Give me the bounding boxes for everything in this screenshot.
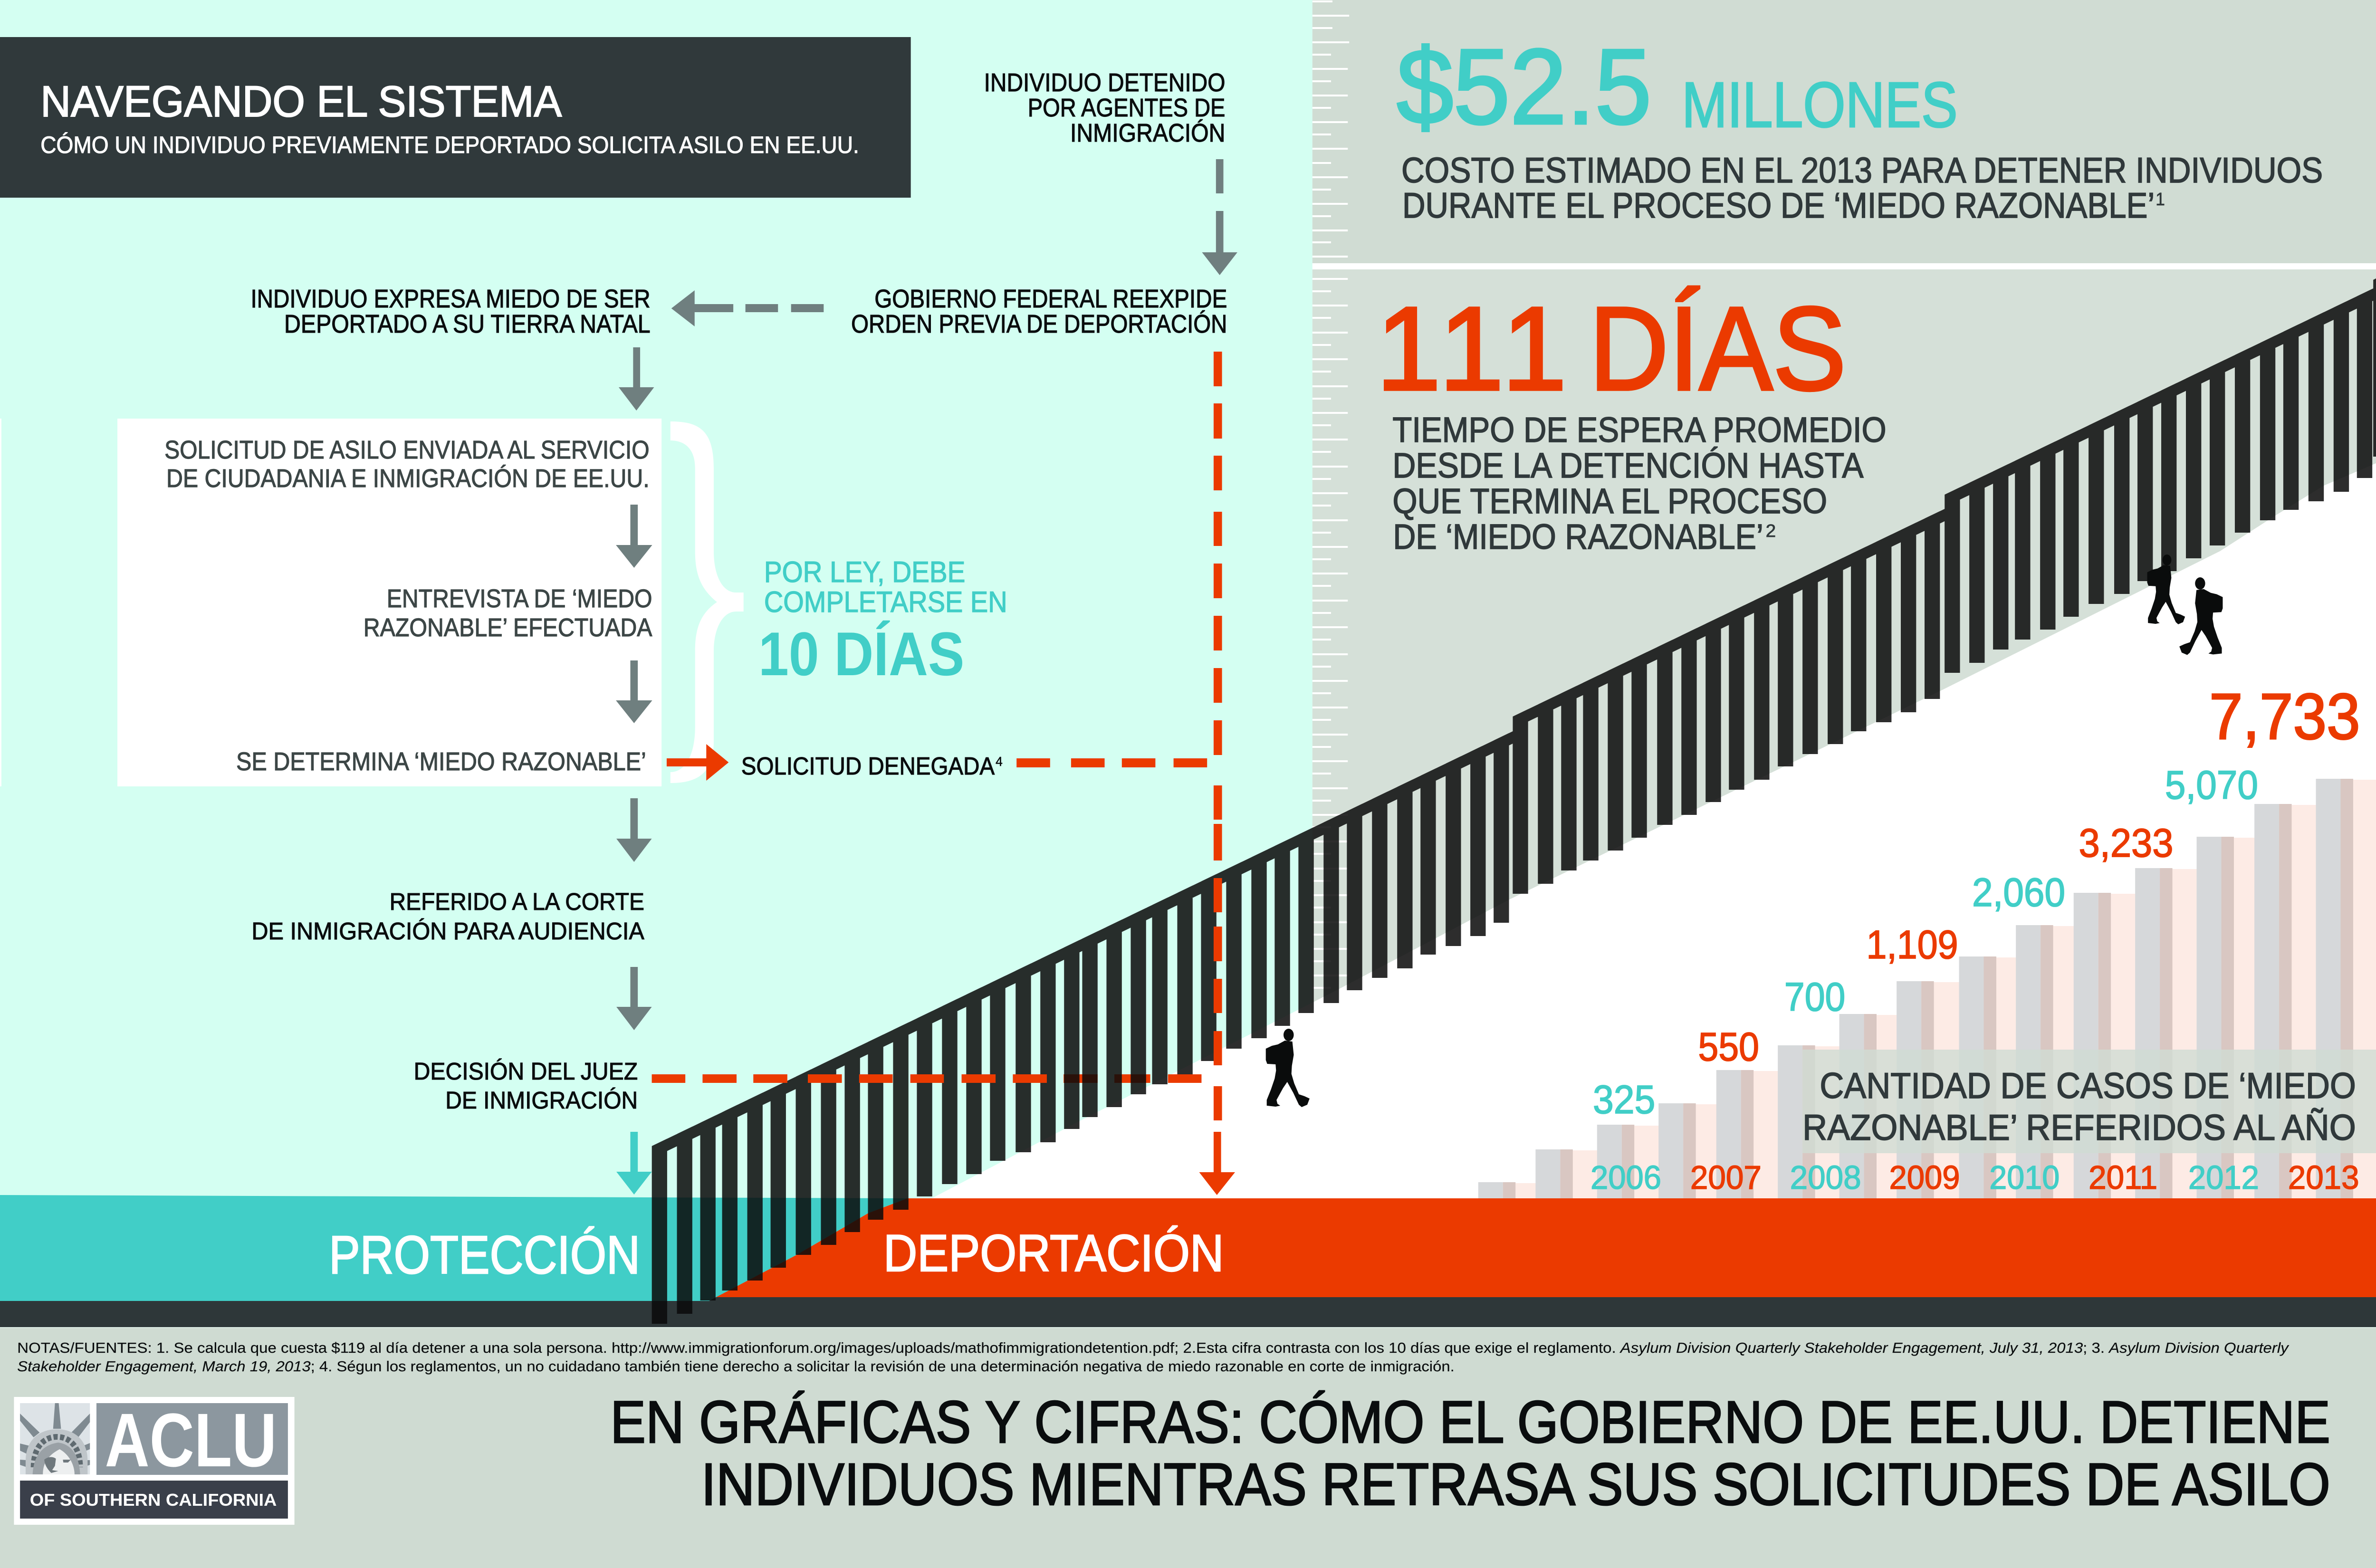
header box: CÓMO UN INDIVIDUO PREVIAMENTE DEPORTADO SOLICITA ASILO EN EE.UU.	[40, 132, 859, 158]
chart value labels: 550	[1698, 1024, 1759, 1069]
stat: average wait	[1376, 283, 1887, 556]
panel: mint background	[0, 0, 1313, 1198]
chart year labels	[1590, 1158, 2359, 1196]
step: detained individual	[984, 69, 1225, 147]
chart year labels: 2013	[2288, 1158, 2359, 1196]
chart year labels: 2012	[2188, 1158, 2259, 1196]
step: individual expresses fear: INDIVIDUO EXPRESA MIEDO DE SER	[250, 285, 651, 313]
chart value labels: 7,733	[2209, 680, 2360, 753]
arrow: dashed grey left	[671, 290, 824, 326]
panel: lower grey background	[1313, 269, 2376, 1003]
step: federal government reissues order: GOBIERNO FEDERAL REEXPIDE	[874, 285, 1227, 313]
icon: walking person one	[2147, 555, 2185, 624]
label: protection: PROTECCIÓN	[329, 1225, 640, 1285]
chart year labels: 2010	[1989, 1158, 2060, 1196]
logo: ACLU of Southern California: ACLU	[105, 1398, 277, 1482]
step: individual expresses fear: DEPORTADO A SU TIERRA NATAL	[284, 310, 651, 338]
logo: ACLU of Southern California	[14, 1397, 295, 1525]
bottom headline	[610, 1389, 2330, 1518]
band: dark base	[0, 1297, 2376, 1327]
callout: ten days by law	[758, 555, 1007, 688]
chart value labels: 700	[1784, 975, 1845, 1019]
brace	[671, 421, 744, 783]
chart value labels: 325	[1593, 1077, 1655, 1122]
step: detained individual: INDIVIDUO DETENIDO	[984, 69, 1225, 97]
chart year labels: 2006	[1590, 1158, 1661, 1196]
arrow: grey down to decision	[616, 967, 652, 1030]
stat: average wait: DE ‘MIEDO RAZONABLE’	[1393, 517, 1763, 556]
stat: average wait: DÍAS	[1589, 283, 1846, 415]
panel: ten-day process	[117, 419, 661, 786]
arrow: dashed red horizontal from judge decision	[652, 1074, 1201, 1083]
label: deportation: DEPORTACIÓN	[883, 1224, 1224, 1282]
panel: ten-day process: SE DETERMINA ‘MIEDO RAZONABLE’	[236, 748, 646, 776]
step: referred to immigration court: REFERIDO A LA CORTE	[390, 888, 644, 915]
callout: ten days by law: COMPLETARSE EN	[764, 585, 1007, 619]
border fence	[652, 276, 2376, 1324]
arrow: red to denied	[667, 744, 728, 781]
step: detained individual: INMIGRACIÓN	[1070, 119, 1225, 147]
ruler ticks	[1313, 1, 1349, 988]
stat: detention cost	[1397, 27, 2323, 225]
step: judge decision: DE INMIGRACIÓN	[445, 1087, 638, 1114]
step: judge decision	[414, 1058, 638, 1114]
step: federal government reissues order: ORDEN PREVIA DE DEPORTACIÓN	[851, 310, 1227, 338]
step: referred to immigration court	[251, 888, 644, 945]
header box: NAVEGANDO EL SISTEMA	[40, 77, 562, 126]
step: federal government reissues order	[851, 285, 1227, 338]
band: deportation	[716, 1198, 2376, 1297]
panel: ten-day process: ENTREVISTA DE ‘MIEDO	[387, 585, 652, 613]
notes and sources: NOTAS/FUENTES: 1. Se calcula que cuesta $119 al día detener a una sola persona. http://www.immigrationforum.org/images/uploads/mathofimmigrationdetention.pdf; 2.Esta cifra contrasta con los 10 días que exige el reglamento. Asylum Division Quarterly Stakeholder Engagement, July 31, 2013 ; 3. Asylum Division Quarterly	[17, 1339, 2289, 1356]
chart year labels: 2008	[1790, 1158, 1861, 1196]
chart value labels	[1593, 680, 2360, 1122]
panel: footer background	[0, 1328, 2376, 1568]
bar chart: fear cases by year	[1478, 779, 2376, 1198]
arrow: teal to protection	[616, 1132, 652, 1195]
dashes behind the fence	[1063, 1074, 1150, 1083]
panel: upper grey background	[1313, 0, 2376, 263]
callout: ten days by law: POR LEY, DEBE	[764, 555, 965, 589]
stat: detention cost: 1	[2156, 189, 2165, 209]
step: request denied: SOLICITUD DENEGADA	[741, 752, 995, 780]
panel: ten-day process: DE CIUDADANIA E INMIGRACIÓN DE EE.UU.	[166, 465, 650, 493]
stat: average wait: TIEMPO DE ESPERA PROMEDIO	[1392, 410, 1887, 449]
stat: average wait: 2	[1766, 521, 1776, 541]
chart value labels: 2,060	[1972, 870, 2065, 915]
step: request denied: 4	[996, 754, 1003, 769]
stat: average wait: QUE TERMINA EL PROCESO	[1392, 481, 1827, 521]
stat: detention cost: COSTO ESTIMADO EN EL 2013 PARA DETENER INDIVIDUOS	[1401, 150, 2323, 190]
icon: walking person near fence	[1266, 1029, 1310, 1107]
step: referred to immigration court: DE INMIGRACIÓN PARA AUDIENCIA	[251, 918, 644, 945]
icon: statue of liberty crown	[20, 1403, 90, 1474]
arrow: dashed red vertical to deportation	[1199, 352, 1235, 1195]
arrow: dashed grey down	[1202, 159, 1237, 275]
band: protection	[0, 1195, 908, 1301]
step: detained individual: POR AGENTES DE	[1028, 94, 1225, 122]
chart caption panel	[1802, 1050, 2376, 1153]
chart value labels: 5,070	[2165, 763, 2258, 807]
chart year labels: 2011	[2089, 1158, 2157, 1196]
icon: walking person two	[2179, 577, 2223, 655]
arrow: grey down	[619, 347, 654, 411]
header box	[0, 37, 911, 198]
callout: ten days by law: 10 DÍAS	[758, 620, 964, 688]
stat: detention cost: $52.5	[1397, 27, 1651, 146]
step: individual expresses fear	[250, 285, 651, 338]
stat: average wait: 111	[1376, 283, 1567, 415]
arrow: grey down to court	[616, 798, 652, 862]
chart caption panel: RAZONABLE’ REFERIDOS AL AÑO	[1802, 1107, 2356, 1147]
chart year labels: 2007	[1690, 1158, 1762, 1196]
chart value labels: 1,109	[1866, 922, 1958, 967]
panel: ten-day process: RAZONABLE’ EFECTUADA	[364, 614, 652, 642]
chart year labels: 2009	[1889, 1158, 1960, 1196]
step: judge decision: DECISIÓN DEL JUEZ	[414, 1058, 638, 1085]
chart caption panel: CANTIDAD DE CASOS DE ‘MIEDO	[1820, 1065, 2356, 1106]
stat: detention cost: MILLONES	[1682, 69, 1958, 141]
notes and sources	[17, 1339, 2289, 1375]
notes and sources: Stakeholder Engagement, March 19, 2013 ; 4. Ségun los reglamentos, un no cuidadano también tiene derecho a solicitar la revisión de una determinación negativa de miedo razonable en corte de inmigración.	[17, 1358, 1455, 1375]
panel: ten-day process: SOLICITUD DE ASILO ENVIADA AL SERVICIO	[164, 436, 650, 464]
chart value labels: 3,233	[2079, 821, 2174, 865]
stat: average wait: DESDE LA DETENCIÓN HASTA	[1392, 446, 1864, 485]
logo: ACLU of Southern California: OF SOUTHERN CALIFORNIA	[30, 1491, 277, 1510]
arrow: dashed red from denied request	[1016, 758, 1207, 767]
stat: detention cost: DURANTE EL PROCESO DE ‘MIEDO RAZONABLE’	[1402, 185, 2155, 225]
